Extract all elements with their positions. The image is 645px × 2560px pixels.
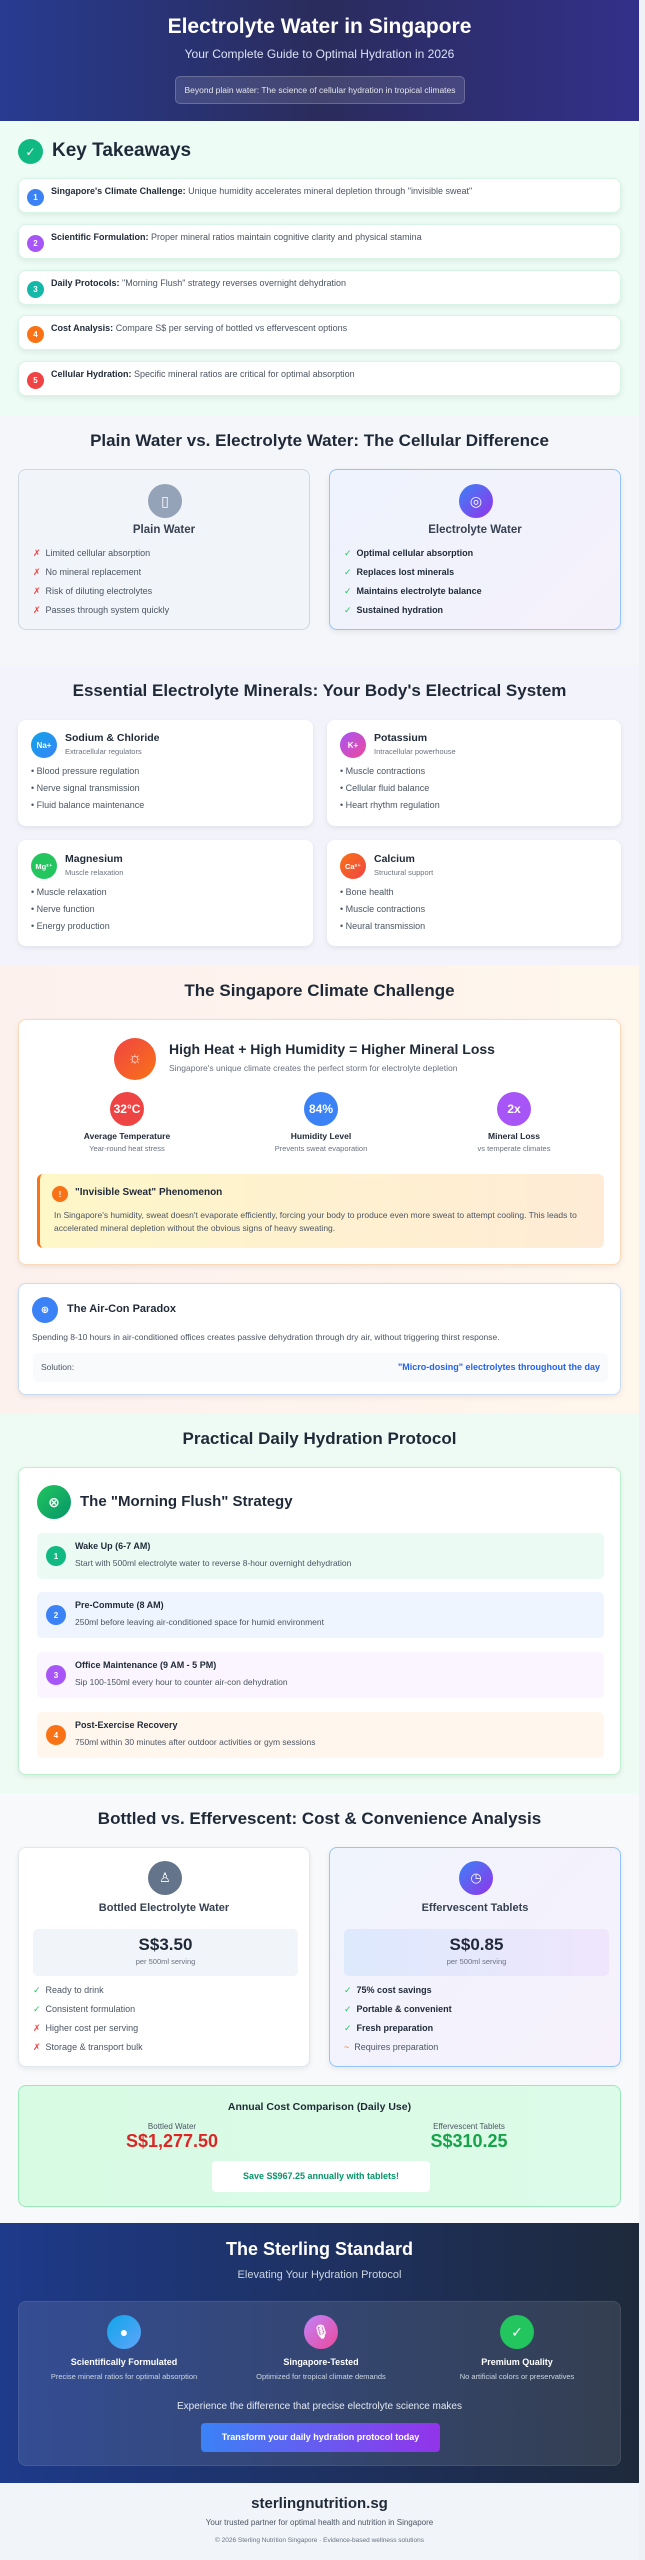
card: sodium: Sodium & Chloride: [65, 732, 160, 744]
card: magnesium: [18, 840, 313, 946]
icon: check circle: [18, 139, 43, 164]
card: plain water: Plain Water: [133, 524, 195, 536]
takeaway 4: [18, 315, 621, 350]
button: cta: Transform your daily hydration protocol today: [222, 2432, 419, 2442]
panel: daily protocol: [0, 1413, 639, 1793]
panel: annual cost comparison: S$1,277.50: [126, 2131, 218, 2151]
card: heat humidity: Singapore's unique climate creates the perfect storm for electrolyte depletion: [169, 1063, 457, 1073]
card: calcium: • Muscle contractions: [340, 904, 425, 914]
takeaway 1: Singapore's Climate Challenge: Unique humidity accelerates mineral depletion through "invisible sweat": [51, 186, 472, 196]
panel: climate challenge: [0, 965, 639, 1413]
card: plain water: ✗ Risk of diluting electrolytes: [33, 586, 152, 596]
card: plain water: [18, 469, 310, 630]
card: effervescent: ✓ Fresh preparation: [344, 2023, 433, 2033]
card: calcium: Ca²⁺: [345, 862, 361, 870]
step 1: [37, 1533, 604, 1579]
step 2: 2: [54, 1610, 58, 1620]
panel: annual cost comparison: [18, 2085, 621, 2207]
card: potassium: Intracellular powerhouse: [374, 747, 456, 756]
stat: humidity: Prevents sweat evaporation: [275, 1144, 367, 1153]
header: [0, 0, 639, 121]
stat: temperature: Average Temperature: [84, 1131, 170, 1141]
subtitle: Your Complete Guide to Optimal Hydration in 2026: [185, 47, 454, 61]
takeaway 3: 3: [33, 285, 38, 294]
stat: humidity: [275, 1092, 367, 1153]
card: plain water: ✗ No mineral replacement: [33, 567, 141, 577]
takeaway 3: Daily Protocols: "Morning Flush" strategy reverses overnight dehydration: [51, 278, 346, 288]
heading: The Singapore Climate Challenge: [184, 981, 455, 1000]
card: calcium: Structural support: [374, 868, 433, 877]
feature: premium quality: No artificial colors or preservatives: [460, 2372, 574, 2381]
heading: The Sterling Standard: [226, 2239, 413, 2259]
panel: annual cost comparison: S$310.25: [430, 2131, 508, 2151]
feature: premium quality: ✓: [511, 2324, 523, 2340]
title: Electrolyte Water in Singapore: [168, 15, 471, 38]
card: air-con paradox: Spending 8-10 hours in air-conditioned offices creates passive dehydration through dry air, without triggering thirst response.: [32, 1332, 500, 1342]
heading: Essential Electrolyte Minerals: Your Body's Electrical System: [73, 681, 566, 700]
step 4: 750ml within 30 minutes after outdoor activities or gym sessions: [75, 1737, 315, 1747]
button: cta: [201, 2423, 440, 2452]
card: calcium: • Neural transmission: [340, 921, 425, 931]
card: calcium: • Bone health: [340, 887, 394, 897]
callout: invisible sweat: !: [59, 1190, 61, 1198]
step 3: [37, 1652, 604, 1698]
stat: mineral loss: 2x: [507, 1102, 521, 1116]
step 2: Pre-Commute (8 AM): [75, 1600, 164, 1610]
card: magnesium: Muscle relaxation: [65, 868, 123, 877]
footer: sterlingnutrition.sg: [251, 2495, 388, 2512]
step 2: 250ml before leaving air-conditioned space for humid environment: [75, 1617, 324, 1627]
card: morning flush: The "Morning Flush" Strategy: [80, 1493, 293, 1510]
card: plain water: ✗ Limited cellular absorption: [33, 548, 150, 558]
card: electrolyte water: [329, 469, 621, 630]
panel: sterling standard: [0, 2223, 639, 2483]
callout: invisible sweat: "Invisible Sweat" Phenomenon: [75, 1187, 222, 1198]
card: effervescent: ✓ Portable & convenient: [344, 2004, 452, 2014]
card: sodium: [18, 720, 313, 826]
stat: temperature: [84, 1092, 170, 1153]
callout: invisible sweat: [37, 1174, 604, 1248]
card: air-con paradox: "Micro-dosing" electrolytes throughout the day: [398, 1362, 600, 1372]
stat: temperature: Year-round heat stress: [89, 1144, 165, 1153]
tagline box: Beyond plain water: The science of cellular hydration in tropical climates: [184, 85, 456, 95]
tagline box: [175, 76, 465, 104]
takeaway 2: [18, 224, 621, 259]
panel: key takeaways: [0, 121, 639, 415]
takeaway 5: [18, 361, 621, 396]
feature: scientifically formulated: Precise mineral ratios for optimal absorption: [51, 2372, 197, 2381]
card: morning flush: ⊗: [48, 1494, 60, 1510]
card: bottled: [18, 1847, 310, 2067]
step 1: 1: [54, 1552, 58, 1560]
feature: premium quality: Premium Quality: [481, 2357, 553, 2367]
footer: Your trusted partner for optimal health and nutrition in Singapore: [206, 2518, 433, 2527]
card: electrolyte water: ✓ Replaces lost minerals: [344, 567, 454, 577]
feature: singapore-tested: 🎙: [313, 2324, 329, 2339]
step 3: Sip 100-150ml every hour to counter air-con dehydration: [75, 1677, 288, 1687]
panel: annual cost comparison: Annual Cost Comparison (Daily Use): [228, 2101, 411, 2113]
card: air-con paradox: [18, 1283, 621, 1395]
feature: singapore-tested: [256, 2315, 386, 2381]
feature: singapore-tested: Optimized for tropical climate demands: [256, 2372, 386, 2381]
feature: scientifically formulated: ●: [120, 2324, 128, 2340]
takeaway 1: [18, 178, 621, 213]
card: bottled: ✗ Storage & transport bulk: [33, 2042, 143, 2052]
stat: humidity: Humidity Level: [291, 1131, 351, 1141]
panel: minerals: [0, 665, 639, 965]
card: magnesium: Magnesium: [65, 853, 123, 865]
card: electrolyte water: ✓ Maintains electrolyte balance: [344, 586, 482, 596]
card: potassium: Potassium: [374, 732, 427, 744]
step 4: [37, 1712, 604, 1758]
card: potassium: • Muscle contractions: [340, 766, 425, 776]
card: effervescent: ~ Requires preparation: [344, 2042, 438, 2052]
card: plain water: ▯: [161, 492, 169, 508]
panel: plain vs electrolyte: [0, 415, 639, 665]
card: magnesium: • Muscle relaxation: [31, 887, 107, 897]
card: potassium: K+: [348, 740, 358, 750]
stat: humidity: 84%: [309, 1102, 333, 1116]
footer: © 2026 Sterling Nutrition Singapore · Evidence-based wellness solutions: [215, 2537, 424, 2544]
panel: cost analysis: [0, 1793, 639, 2223]
icon: sun: [114, 1038, 156, 1080]
feature: premium quality: [460, 2315, 574, 2381]
feature box: Experience the difference that precise electrolyte science makes: [177, 2401, 462, 2412]
stat: mineral loss: [478, 1092, 550, 1153]
feature: scientifically formulated: [51, 2315, 197, 2381]
step 1: Start with 500ml electrolyte water to reverse 8-hour overnight dehydration: [75, 1558, 351, 1568]
card: bottled: per 500ml serving: [136, 1957, 195, 1966]
panel: annual cost comparison: Bottled Water: [148, 2122, 196, 2131]
takeaway 3: [18, 270, 621, 305]
feature box: [18, 2301, 621, 2466]
stat: mineral loss: Mineral Loss: [488, 1131, 540, 1141]
panel: annual cost comparison: Effervescent Tablets: [433, 2122, 505, 2131]
card: sodium: Extracellular regulators: [65, 747, 142, 756]
step 4: Post-Exercise Recovery: [75, 1720, 178, 1730]
heading: Plain Water vs. Electrolyte Water: The Cellular Difference: [90, 431, 549, 450]
card: morning flush: [18, 1467, 621, 1775]
card: sodium: • Blood pressure regulation: [31, 766, 139, 776]
card: bottled: ✗ Higher cost per serving: [33, 2023, 138, 2033]
card: bottled: S$3.50: [139, 1935, 192, 1954]
card: electrolyte water: ✓ Optimal cellular absorption: [344, 548, 473, 558]
card: sodium: Na+: [37, 740, 51, 750]
card: air-con paradox: The Air-Con Paradox: [67, 1303, 176, 1315]
step 2: [37, 1592, 604, 1638]
takeaway 5: 5: [33, 376, 38, 385]
card: electrolyte water: Electrolyte Water: [428, 524, 522, 536]
card: magnesium: Mg²⁺: [35, 862, 53, 870]
card: heat humidity: [18, 1019, 621, 1265]
heading: Key Takeaways: [52, 140, 191, 161]
footer: [0, 2483, 639, 2560]
card: calcium: [327, 840, 621, 946]
card: air-con paradox: Solution:: [41, 1362, 74, 1372]
card: magnesium: • Nerve function: [31, 904, 95, 914]
card: bottled: Bottled Electrolyte Water: [99, 1902, 229, 1914]
card: bottled: ✓ Ready to drink: [33, 1985, 104, 1995]
icon: sun: ☼: [128, 1050, 142, 1067]
takeaway 2: Scientific Formulation: Proper mineral ratios maintain cognitive clarity and physical stamina: [51, 232, 422, 242]
card: plain water: ✗ Passes through system quickly: [33, 605, 169, 615]
card: effervescent: Effervescent Tablets: [422, 1902, 528, 1914]
step 3: 3: [54, 1670, 58, 1680]
card: bottled: ✓ Consistent formulation: [33, 2004, 135, 2014]
card: magnesium: • Energy production: [31, 921, 110, 931]
callout: invisible sweat: In Singapore's humidity, sweat doesn't evaporate efficiently, forcing your body to produce even more sweat to attempt cooling. This leads to accelerated mineral depletion without the obvious signs of heavy sweating.: [54, 1210, 577, 1233]
card: effervescent: per 500ml serving: [447, 1957, 506, 1966]
heading: Bottled vs. Effervescent: Cost & Convenience Analysis: [98, 1809, 541, 1828]
card: sodium: • Fluid balance maintenance: [31, 800, 144, 810]
card: sodium: • Nerve signal transmission: [31, 783, 140, 793]
takeaway 1: 1: [33, 193, 38, 202]
card: effervescent: ✓ 75% cost savings: [344, 1985, 432, 1995]
card: electrolyte water: ✓ Sustained hydration: [344, 605, 443, 615]
stat: mineral loss: vs temperate climates: [478, 1144, 550, 1153]
callout: savings: [212, 2161, 430, 2192]
icon: check circle: ✓: [25, 144, 36, 158]
card: effervescent: [329, 1847, 621, 2067]
panel: sterling standard: Elevating Your Hydration Protocol: [238, 2269, 401, 2281]
takeaway 4: 4: [33, 330, 38, 339]
feature: singapore-tested: Singapore-Tested: [283, 2357, 359, 2367]
card: electrolyte water: ◎: [470, 492, 482, 508]
card: heat humidity: High Heat + High Humidity = Higher Mineral Loss: [169, 1041, 495, 1057]
callout: savings: Save S$967.25 annually with tablets!: [243, 2171, 399, 2181]
stat: temperature: 32°C: [114, 1102, 140, 1116]
takeaway 2: 2: [33, 239, 38, 248]
step 3: Office Maintenance (9 AM - 5 PM): [75, 1660, 216, 1670]
heading: Practical Daily Hydration Protocol: [183, 1429, 456, 1448]
card: calcium: Calcium: [374, 853, 415, 865]
card: effervescent: S$0.85: [450, 1935, 503, 1954]
feature: scientifically formulated: Scientifically Formulated: [71, 2357, 177, 2367]
step 4: 4: [54, 1730, 58, 1740]
takeaway 5: Cellular Hydration: Specific mineral ratios are critical for optimal absorption: [51, 369, 355, 379]
card: air-con paradox: ⊕: [41, 1304, 49, 1316]
card: bottled: ♙: [159, 1870, 171, 1885]
card: potassium: [327, 720, 621, 826]
step 1: Wake Up (6-7 AM): [75, 1541, 150, 1551]
card: potassium: • Heart rhythm regulation: [340, 800, 440, 810]
card: potassium: • Cellular fluid balance: [340, 783, 429, 793]
takeaway 4: Cost Analysis: Compare S$ per serving of bottled vs effervescent options: [51, 323, 347, 333]
card: effervescent: ◷: [470, 1870, 482, 1885]
